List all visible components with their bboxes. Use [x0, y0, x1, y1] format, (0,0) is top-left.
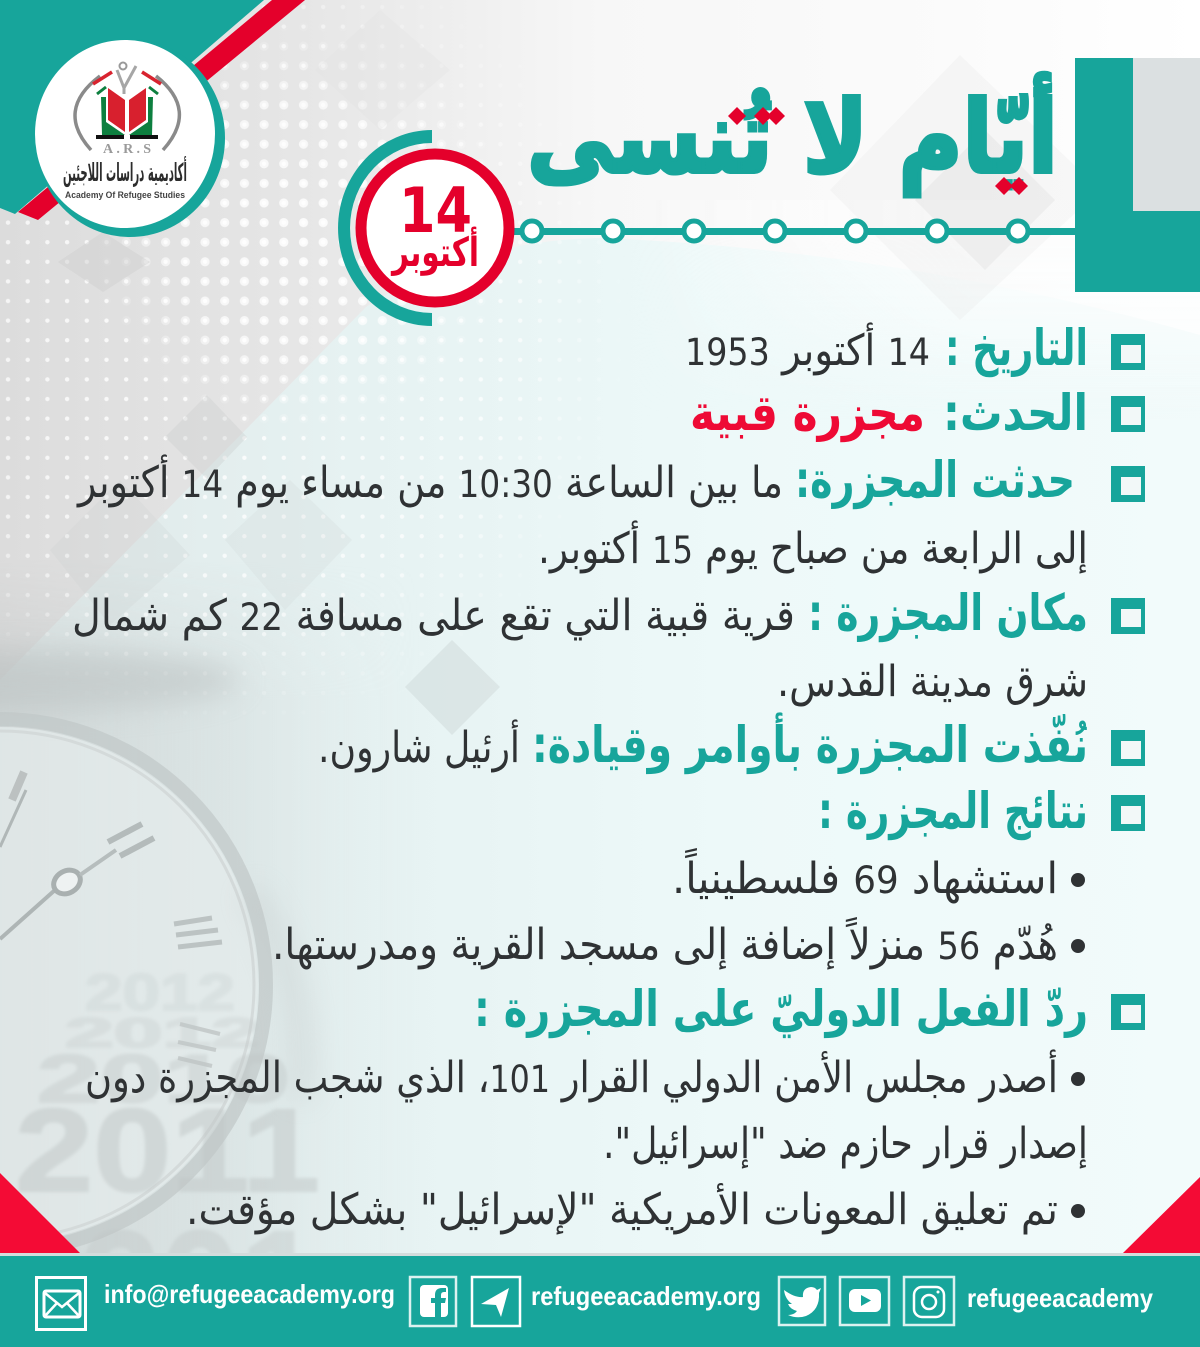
- icon: bullet: [1111, 396, 1145, 432]
- row: event: [690, 384, 1145, 443]
- date number: 14: [399, 174, 472, 247]
- email address: info@refugeeacademy.org: [104, 1279, 395, 1309]
- row: time: حدثت المجزرة:: [795, 451, 1075, 510]
- row: time: إلى الرابعة من صباح يوم 15 أكتوبر.: [538, 520, 1088, 574]
- icon: bullet: [1111, 795, 1145, 831]
- row: international reaction: إصدار قرار حازم ضد "إسرائيل".: [603, 1119, 1088, 1169]
- row: place: شرق مدينة القدس.: [777, 657, 1088, 707]
- red diamond dots: [728, 107, 1028, 195]
- row: date: التاريخ :: [945, 319, 1088, 378]
- icon: telegram: [472, 1277, 520, 1326]
- logo english name: Academy Of Refugee Studies: [65, 190, 185, 201]
- row: results: نتائج المجزرة :: [818, 782, 1088, 841]
- watermark year numbers: 2012: [85, 964, 235, 1022]
- watermark year numbers: 2010: [37, 1041, 290, 1117]
- row: time: ما بين الساعة 10:30 من مساء يوم 14 أكتوبر: [76, 454, 783, 508]
- right header block: [1075, 58, 1200, 292]
- row: event: مجزرة قبية: [690, 384, 925, 443]
- row: date: [685, 319, 1145, 378]
- watermark year numbers: 2011: [15, 1085, 320, 1217]
- clock watermark: [0, 650, 302, 1251]
- icon: instagram: [904, 1277, 954, 1325]
- website: refugeeacademy.org: [531, 1281, 761, 1311]
- row: place: قرية قبية التي تقع على مسافة 22 كم شمال: [72, 591, 795, 641]
- logo badge: [35, 39, 225, 237]
- icon: email: [36, 1278, 86, 1330]
- logo initials: A.R.S: [103, 142, 151, 157]
- corner red triangles: [0, 1173, 1200, 1253]
- watermark year numbers: 2012: [65, 1009, 260, 1056]
- row: date: 14 أكتوبر 1953: [685, 322, 930, 376]
- timeline: [510, 221, 1076, 241]
- row: commander: أرئيل شارون.: [318, 719, 520, 773]
- row: results: هُدّم 56 منزلاً إضافة إلى مسجد القرية ومدرستها.: [272, 917, 1058, 970]
- footer: [0, 1253, 1200, 1347]
- icon: facebook: [410, 1277, 456, 1326]
- row: time: [76, 451, 1145, 574]
- date month: أكتوبر: [391, 226, 479, 276]
- row: results: استشهاد 69 فلسطينياً.: [672, 848, 1058, 904]
- title: أيّام لا تُنسى: [527, 72, 1058, 196]
- row: international reaction: تم تعليق المعونات الأمريكية "لإسرائيل" بشكل مؤقت.: [186, 1182, 1058, 1235]
- icon: bullet: [1111, 334, 1145, 370]
- icon: bullet: [1111, 598, 1145, 634]
- row: results: [272, 782, 1145, 970]
- row: commander: [318, 712, 1145, 775]
- social handle: refugeeacademy: [967, 1283, 1153, 1313]
- row: place: [72, 584, 1145, 707]
- top-left corner banner: [0, 0, 305, 220]
- date badge: [338, 130, 509, 326]
- row: event: الحدث:: [943, 384, 1088, 442]
- row: international reaction: [85, 980, 1145, 1235]
- row: international reaction: أصدر مجلس الأمن الدولي القرار 101، الذي شجب المجزرة دون: [85, 1049, 1058, 1103]
- icon: youtube: [840, 1277, 889, 1325]
- row: place: مكان المجزرة :: [808, 584, 1088, 643]
- logo badge: أكاديمية دراسات اللاجئين: [63, 156, 187, 188]
- icon: bullet: [1111, 730, 1145, 766]
- icon: twitter: [779, 1277, 825, 1325]
- icon: academy book logo: [75, 62, 179, 150]
- watermark year numbers: [18, 975, 318, 1253]
- icon: bullet: [1111, 994, 1145, 1030]
- icon: bullet: [1111, 466, 1145, 502]
